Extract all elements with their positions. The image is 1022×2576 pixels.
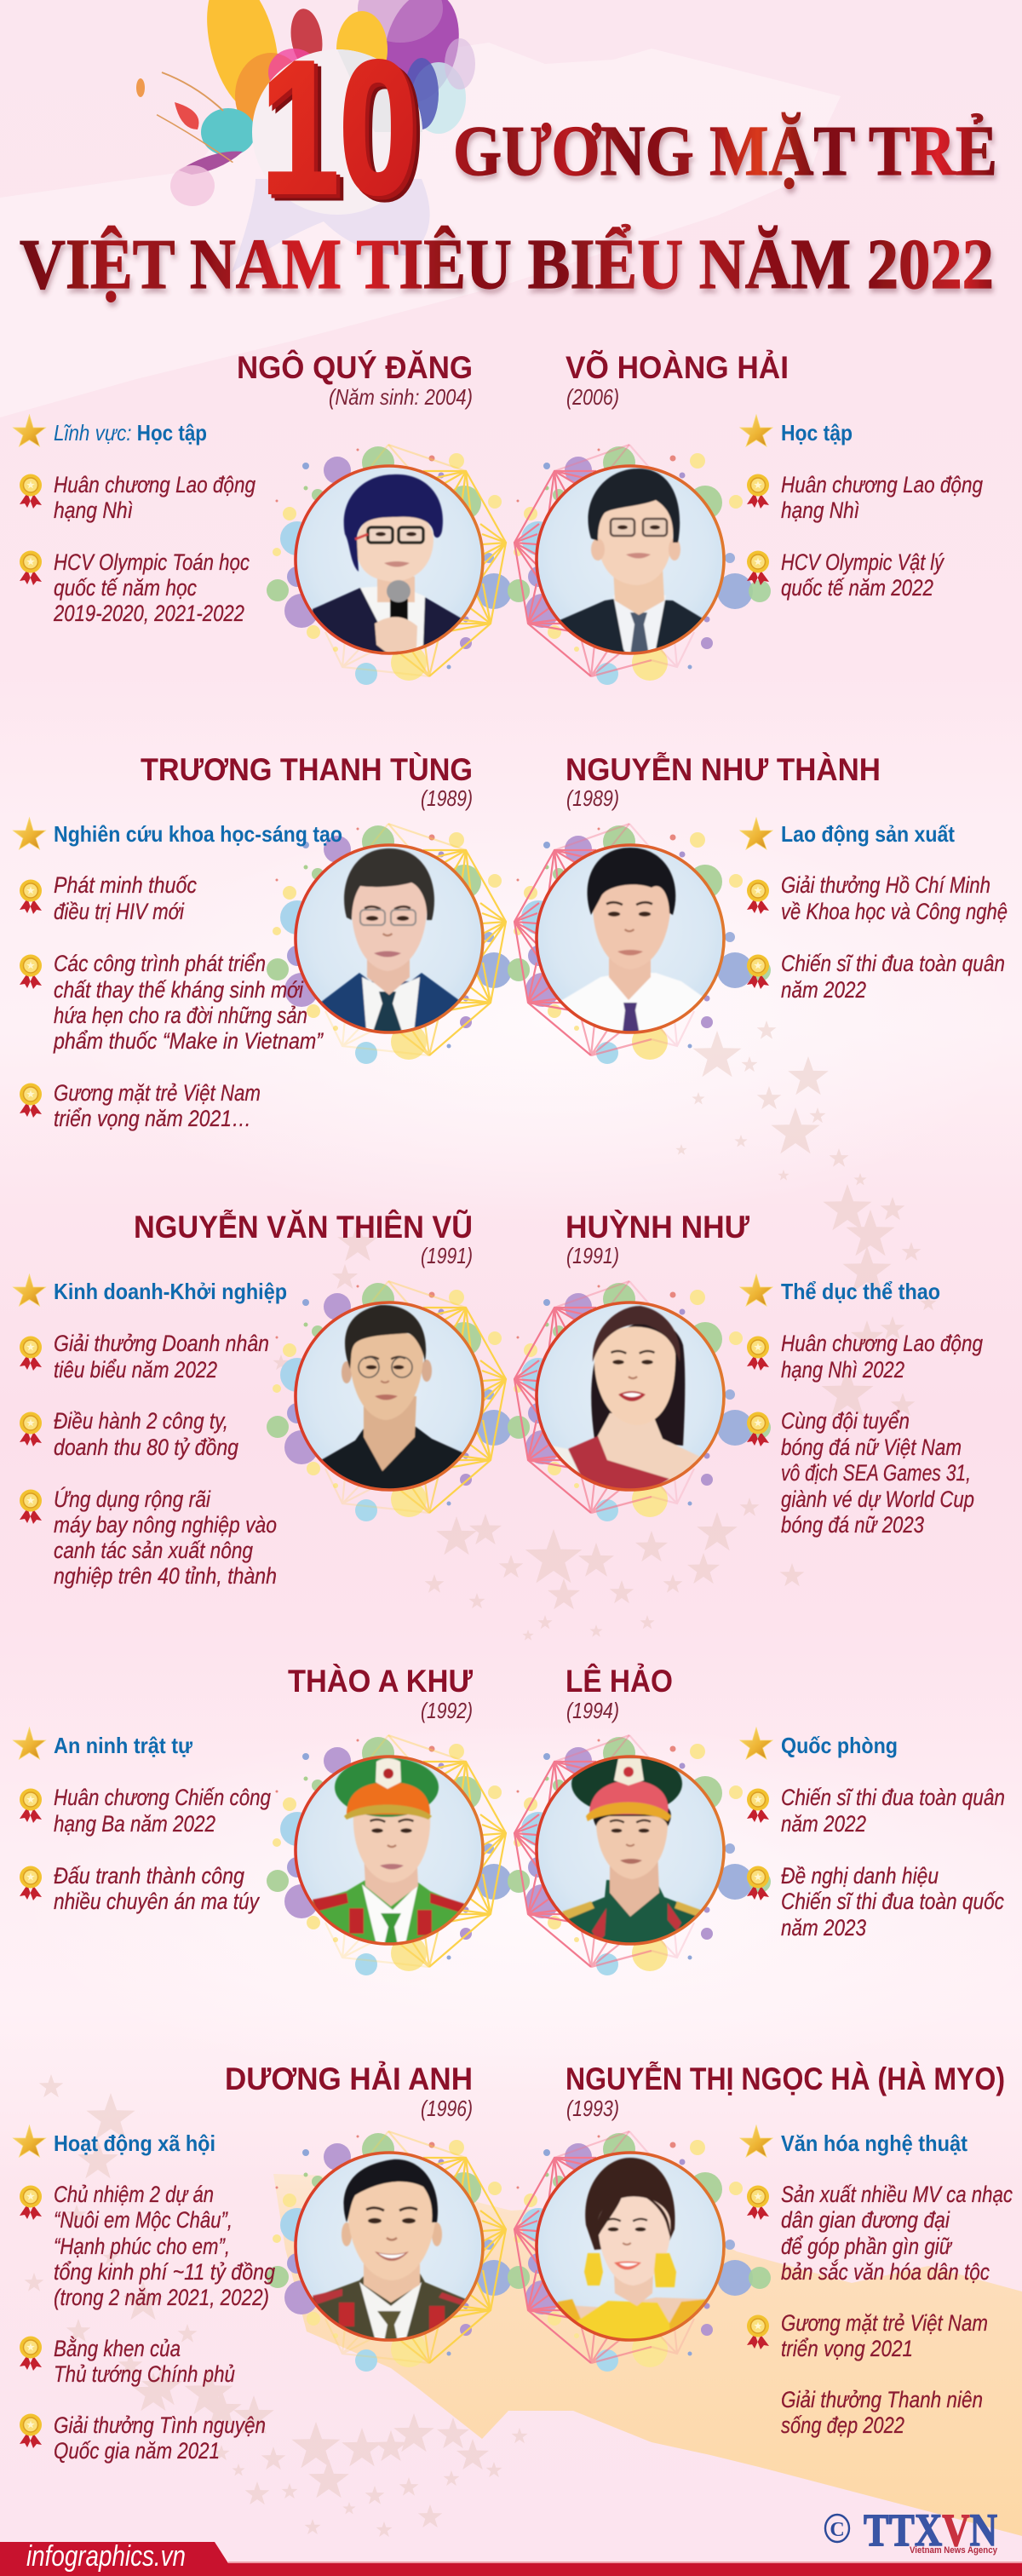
achievement 2: [747, 1408, 974, 1538]
achievement 2: triển vọng 2021: [781, 2336, 913, 2361]
achievement 2: hứa hẹn cho ra đời những sản: [54, 1003, 307, 1028]
achievement 2: bóng đá nữ 2023: [781, 1512, 924, 1538]
portrait: Thào A Khư: [267, 1735, 530, 1975]
birth year: (Năm sinh: 2004): [329, 384, 473, 410]
achievement 2: quốc tế năm học: [54, 575, 197, 601]
birth year: (1996): [421, 2096, 473, 2121]
title splash artwork: [136, 0, 475, 273]
achievement 1: [747, 2182, 1013, 2285]
achievement 1: [747, 472, 983, 523]
field heading with star: An ninh trật tự: [54, 1733, 192, 1758]
title block: [20, 0, 997, 304]
portrait: Nguyễn Thị Ngọc Hà: [508, 2131, 771, 2372]
field heading with star: Học tập: [781, 420, 853, 446]
achievement 2: [20, 549, 250, 626]
achievement 1: điều trị HIV mới: [54, 899, 185, 924]
field heading with star: [14, 818, 342, 849]
achievement 3: nghiệp trên 40 tỉnh, thành: [54, 1563, 277, 1589]
achievement 2: năm 2023: [781, 1915, 866, 1941]
achievement 2: 2019-2020, 2021-2022: [53, 601, 244, 626]
birth year: (1993): [566, 2096, 619, 2121]
achievement 3: Giải thưởng Thanh niên: [781, 2387, 983, 2412]
achievement 2: [747, 2310, 988, 2361]
footer bar: [0, 2504, 1022, 2576]
birth year: (1989): [566, 785, 619, 811]
achievement 2: bóng đá nữ Việt Nam: [781, 1435, 962, 1460]
achievement 1: hạng Nhì 2022: [781, 1357, 904, 1383]
achievement 2: quốc tế năm 2022: [781, 575, 933, 601]
achievement 2: [20, 1863, 260, 1914]
achievement 1: [747, 1331, 983, 1383]
achievement 3: [781, 2387, 983, 2438]
achievement 2: [747, 951, 1005, 1003]
achievement 1: Huân chương Lao động: [781, 1331, 983, 1356]
achievement 2: Thủ tướng Chính phủ: [54, 2361, 235, 2387]
field heading with star: Lĩnh vực: Học tập: [54, 420, 207, 446]
achievement 1: [747, 872, 1008, 924]
achievement 3: [20, 1486, 277, 1589]
achievement 2: năm 2022: [781, 977, 866, 1003]
name: LÊ HẢO: [566, 1663, 673, 1699]
field heading with star: Văn hóa nghệ thuật: [781, 2130, 967, 2156]
portrait: Dương Hải Anh: [267, 2131, 530, 2372]
field heading with star: [14, 1728, 192, 1759]
achievement 2: [20, 951, 324, 1054]
field heading with star: [740, 1728, 898, 1759]
panel: Nguyễn Như Thành: [508, 751, 1008, 1064]
achievement 1: dân gian đương đại: [781, 2207, 950, 2233]
panel: Nguyễn Thị Ngọc Hà: [508, 2061, 1013, 2438]
field heading with star: Lao động sản xuất: [781, 821, 955, 847]
achievement 1: Huân chương Chiến công: [54, 1785, 271, 1810]
portrait: Nguyễn Văn Thiên Vũ: [267, 1281, 530, 1521]
achievement 1: để góp phần gìn giữ: [781, 2234, 953, 2259]
panel: Thào A Khư: [14, 1664, 530, 1975]
agency logo: C: [830, 2519, 845, 2541]
achievement 3: [20, 1080, 261, 1131]
achievement 2: Đấu tranh thành công: [54, 1863, 244, 1889]
birth year: (1992): [421, 1698, 473, 1723]
achievement 1: tiêu biểu năm 2022: [54, 1357, 217, 1383]
field heading with star: [14, 415, 207, 446]
achievement 1: Chủ nhiệm 2 dự án: [54, 2182, 214, 2207]
panel: Võ Hoàng Hải: [508, 349, 983, 685]
panel: Dương Hải Anh: [14, 2061, 530, 2464]
field heading with star: [740, 1274, 940, 1306]
field heading with star: Quốc phòng: [781, 1733, 898, 1758]
achievement 1: Giải thưởng Doanh nhân: [54, 1331, 269, 1356]
field heading with star: [740, 415, 853, 446]
achievement 1: Huân chương Lao động: [781, 472, 983, 497]
achievement 2: doanh thu 80 tỷ đồng: [54, 1435, 238, 1460]
portrait: Ngô Quý Đăng: [267, 445, 530, 685]
panel: Lê Hảo: [508, 1663, 1005, 1975]
achievement 1: [20, 872, 197, 924]
achievement 1: [747, 1785, 1005, 1837]
name: VÕ HOÀNG HẢI: [566, 349, 789, 385]
achievement 3: canh tác sản xuất nông: [54, 1538, 253, 1563]
achievement 3: sống đẹp 2022: [781, 2412, 904, 2438]
achievement 2: phẩm thuốc “Make in Vietnam”: [53, 1028, 324, 1054]
achievement 1: “Hạnh phúc cho em”,: [54, 2234, 230, 2259]
achievement 1: năm 2022: [781, 1811, 866, 1837]
field heading with star: Nghiên cứu khoa học-sáng tạo: [54, 821, 342, 847]
panel: Nguyễn Văn Thiên Vũ: [14, 1209, 530, 1589]
achievement 2: HCV Olympic Vật lý: [781, 549, 944, 575]
portrait: Nguyễn Như Thành: [508, 824, 771, 1064]
achievement 2: Cùng đội tuyển: [781, 1408, 910, 1434]
panel: Huỳnh Như: [508, 1210, 983, 1538]
achievement 1: (trong 2 năm 2021, 2022): [54, 2285, 269, 2310]
achievement 2: nhiều chuyên án ma túy: [54, 1889, 260, 1914]
portrait: Võ Hoàng Hải: [508, 445, 771, 685]
achievement 1: hạng Nhì: [54, 497, 133, 523]
achievement 1: tổng kinh phí ~11 tỷ đồng: [54, 2259, 275, 2285]
achievement 2: [747, 549, 944, 601]
achievement 1: [20, 1331, 269, 1383]
portrait: Lê Hảo: [508, 1735, 771, 1975]
achievement 2: giành vé dự World Cup: [781, 1486, 974, 1512]
achievement 1: hạng Ba năm 2022: [54, 1811, 215, 1837]
birth year: (1989): [421, 785, 473, 811]
achievement 3: Ứng dụng rộng rãi: [54, 1486, 211, 1512]
background stars: [25, 1021, 937, 2537]
name: NGÔ QUÝ ĐĂNG: [237, 349, 473, 385]
achievement 2: [20, 2335, 235, 2387]
achievement 2: chất thay thế kháng sinh mới: [54, 977, 304, 1003]
portrait: Trương Thanh Tùng: [267, 824, 530, 1064]
agency logo: TTXVN: [864, 2504, 997, 2556]
name: NGUYỄN NHƯ THÀNH: [566, 751, 881, 787]
title number 10: 10: [267, 28, 424, 239]
achievement 1: [20, 1785, 271, 1837]
field heading with star: [14, 1274, 287, 1306]
birth year: (1991): [421, 1243, 473, 1268]
birth year: (2006): [566, 384, 619, 410]
achievement 2: [20, 1408, 238, 1460]
achievement 2: vô địch SEA Games 31,: [781, 1460, 971, 1486]
achievement 1: hạng Nhì: [781, 497, 859, 523]
source tab: infographics.vn: [26, 2540, 186, 2573]
achievement 2: Đề nghị danh hiệu: [781, 1863, 939, 1889]
birth year: (1991): [566, 1243, 619, 1268]
achievement 1: [20, 472, 256, 523]
achievement 2: Bằng khen của: [54, 2335, 181, 2361]
field heading with star: Hoạt động xã hội: [54, 2130, 215, 2156]
name: TRƯƠNG THANH TÙNG: [141, 751, 473, 787]
achievement 3: Quốc gia năm 2021: [54, 2438, 220, 2464]
birth year: (1994): [566, 1698, 619, 1723]
name: NGUYỄN VĂN THIÊN VŨ: [134, 1209, 473, 1245]
achievement 2: HCV Olympic Toán học: [54, 549, 250, 575]
title number 10: 10: [264, 26, 421, 237]
achievement 3: máy bay nông nghiệp vào: [54, 1512, 277, 1538]
name: HUỲNH NHƯ: [566, 1210, 749, 1245]
achievement 3: [20, 2412, 266, 2464]
field heading with star: [740, 2125, 967, 2157]
panel: Ngô Quý Đăng: [14, 349, 530, 685]
field heading with star: [14, 2125, 215, 2157]
achievement 1: Huân chương Lao động: [54, 472, 256, 497]
name: THÀO A KHƯ: [288, 1664, 473, 1699]
agency logo: Vietnam News Agency: [910, 2545, 998, 2556]
field heading with star: Thể dục thể thao: [781, 1279, 940, 1304]
field heading with star: Kinh doanh-Khởi nghiệp: [54, 1279, 287, 1304]
title number 10: 10: [261, 22, 417, 233]
achievement 3: Giải thưởng Tình nguyện: [54, 2412, 266, 2438]
achievement 3: Gương mặt trẻ Việt Nam: [54, 1080, 261, 1106]
achievement 2: Điều hành 2 công ty,: [54, 1408, 228, 1434]
achievement 1: [20, 2182, 275, 2310]
panel: Trương Thanh Tùng: [14, 751, 530, 1131]
achievement 2: [747, 1863, 1004, 1941]
achievement 2: Các công trình phát triển: [54, 951, 266, 976]
field heading with star: [740, 818, 955, 849]
portrait: Huỳnh Như: [508, 1281, 771, 1521]
name: DƯƠNG HẢI ANH: [225, 2061, 473, 2096]
achievement 1: “Nuôi em Mộc Châu”,: [54, 2207, 233, 2233]
achievement 3: triển vọng năm 2021…: [54, 1106, 251, 1131]
achievement 1: Phát minh thuốc: [54, 872, 197, 898]
